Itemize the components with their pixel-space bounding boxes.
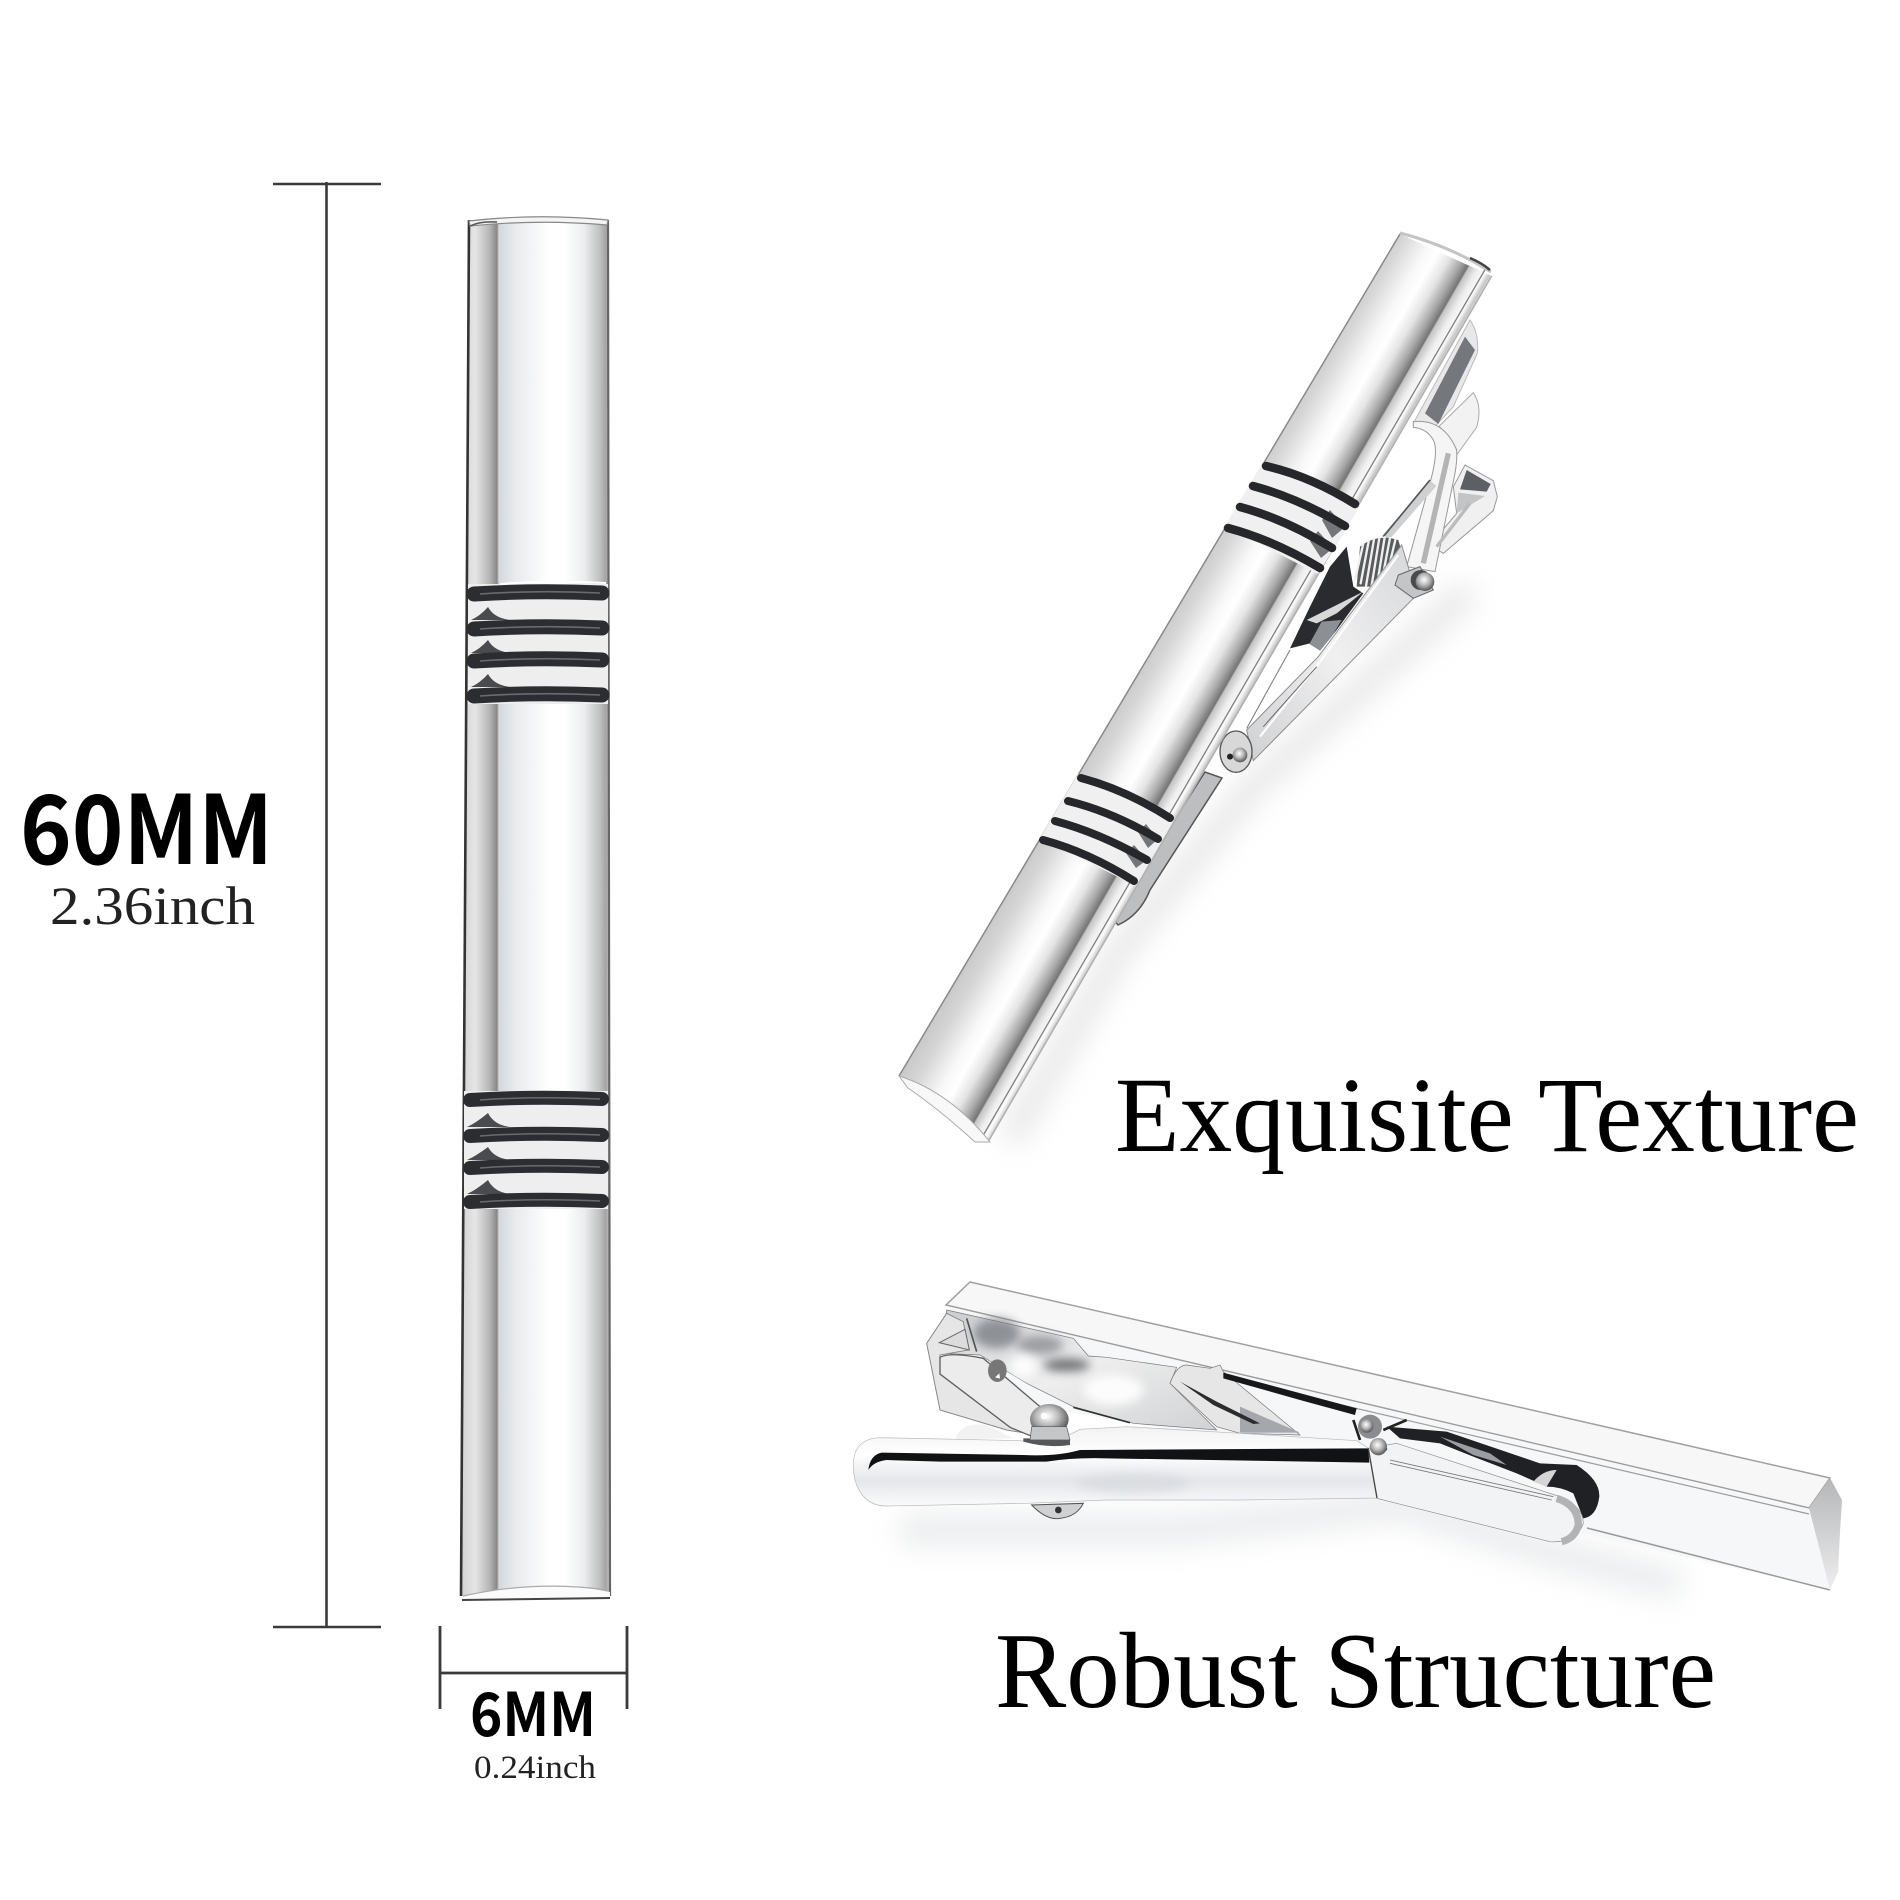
bar side face xyxy=(946,1305,1830,1590)
upper black streak xyxy=(1223,1373,1357,1415)
rivet on handle xyxy=(1023,1438,1070,1446)
forked arm xyxy=(1170,1365,1300,1435)
caption Exquisite Texture: Exquisite Texture xyxy=(1115,1057,1859,1175)
rear clip parts xyxy=(1407,320,1497,572)
width label 6MM: 6MM xyxy=(470,1667,596,1754)
interior plate xyxy=(940,1310,1217,1430)
lower blob xyxy=(957,1424,1013,1439)
caption Robust Structure: Robust Structure xyxy=(995,1612,1716,1731)
ground shadow xyxy=(900,1505,1680,1585)
left frame xyxy=(927,1313,1027,1433)
lower angled band group xyxy=(1040,774,1174,886)
height label in inches: 2.36inch xyxy=(50,876,255,936)
side view tie bar with clip xyxy=(853,1282,1842,1590)
spring plate xyxy=(940,1355,1040,1438)
upper angled band group xyxy=(1225,462,1360,574)
hinge pin xyxy=(1395,567,1433,598)
lower pin xyxy=(1032,1503,1083,1519)
width label in inches: 0.24inch xyxy=(474,1750,597,1786)
height dimension line xyxy=(273,182,381,1627)
dark cavity xyxy=(1290,547,1363,651)
lower clip strip xyxy=(1110,772,1222,925)
bar face xyxy=(899,234,1492,1142)
upper band group xyxy=(468,582,608,704)
spring coil xyxy=(1355,537,1402,587)
lower rivet xyxy=(1220,731,1252,772)
width dimension bracket xyxy=(440,1626,627,1709)
bar end face xyxy=(1809,1478,1842,1590)
connecting rods xyxy=(1385,483,1433,538)
handle black reflection xyxy=(868,1448,1369,1470)
main handle xyxy=(853,1427,1377,1506)
vertical tie bar front view xyxy=(461,217,610,1600)
rear rivet cluster xyxy=(1358,1415,1382,1439)
handle back piece xyxy=(1368,1443,1583,1542)
bar bottom end cap xyxy=(899,1076,990,1142)
main spring arm xyxy=(1247,545,1417,761)
dark cavity near end xyxy=(1387,1427,1599,1518)
soft shadow xyxy=(1010,590,1470,1140)
height label 60MM: 60MM xyxy=(20,755,273,892)
lower band group xyxy=(464,1091,608,1209)
angled tie bar with clip xyxy=(899,233,1497,1142)
bar top band xyxy=(946,1282,1830,1508)
